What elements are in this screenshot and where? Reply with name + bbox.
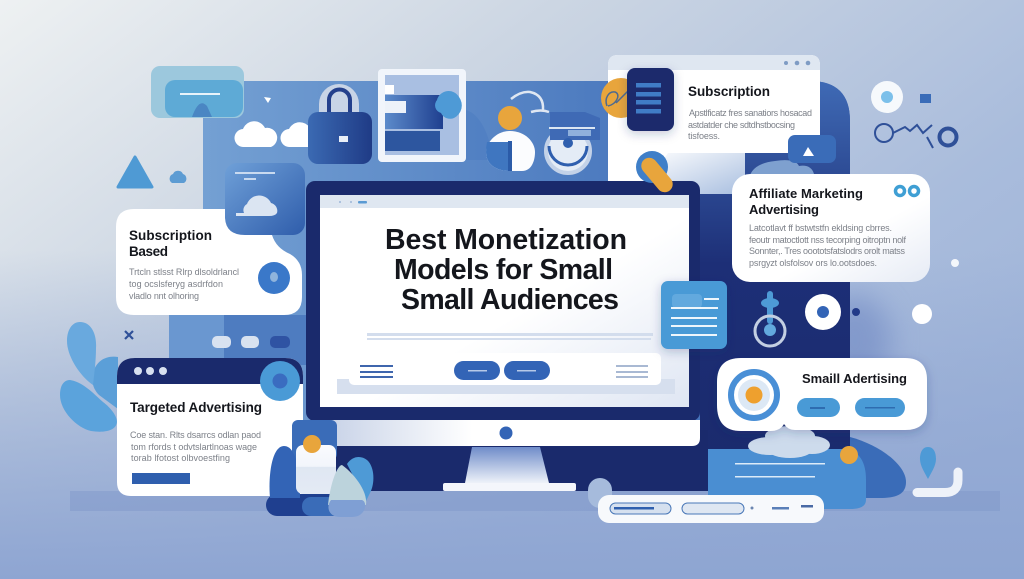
text block [688,108,812,141]
icon: key and ring [755,291,785,346]
text block: torab lfotost olbvoestfing [131,453,230,463]
heading: Subscription [129,228,212,243]
screen [320,195,689,407]
chin [320,420,700,446]
heading: Based [129,244,168,259]
heading: Subscription [688,84,770,99]
title: Models for Small [394,254,613,286]
icon: chat bubble [750,135,836,175]
icon: leaves [60,322,118,432]
text block: Sonnter,. Tres ooototsfatslodrs orolt matss [749,246,906,256]
icon: folder and disc [546,112,600,173]
text block [749,223,906,268]
text block: Coe stan. Rlts dsarrcs odlan paod [130,430,261,440]
panel: targeted advertising card [117,358,303,496]
icon: two rings [896,186,918,196]
title: Best Monetization [385,224,627,256]
icon: navy document [627,68,674,131]
panel: affiliate marketing card [732,174,930,282]
title [385,224,627,316]
icon: pen mark [606,89,630,106]
text block [129,267,239,301]
panel: back window [169,81,850,491]
heading: Advertising [749,202,819,217]
icon: orange clip [636,151,676,195]
text block: tisfoess. [688,131,720,141]
panel: subscription card [601,55,820,194]
icon: drop and L bracket [917,447,958,492]
icon: target circle [805,294,860,330]
heading: Targeted Advertising [130,400,262,415]
text block: Apstlficatz fres sanatiors hosacad [689,108,812,118]
buttons [454,361,500,380]
text block: astdatder che sdtdhstbocsing [688,120,795,130]
panel: bottom control bar [588,478,824,523]
stand [465,447,549,483]
icon: document window [378,69,466,162]
title: Small Audiences [401,284,619,316]
panel: monitor [306,181,700,491]
button [132,473,190,484]
panel: small advertising card [717,358,927,431]
text block: feoutr matoctlott nss tecorping oitroptn nolf [749,235,906,245]
text block: Trtcln stlsst Rlrp dlsoldrlancl [129,267,239,277]
window dots [134,367,167,375]
divider lines [367,333,653,340]
icon: padlock [308,84,372,164]
panel: cloud tab [225,163,305,235]
icon: blue circle [260,361,300,401]
heading [129,228,212,259]
heading [749,186,863,217]
window dots [784,61,810,65]
text block: vladlo nnt olhoring [129,291,199,301]
small control pills [212,336,290,348]
heading: Affiliate Marketing [749,186,863,201]
text block: Latcotlavt ff bstwtstfn ekldsing cbrres. [749,223,892,233]
panel: subscription based card [116,209,302,315]
icon: note [661,281,727,349]
icon: blue circle [258,262,290,294]
panel: blue note base [708,426,906,509]
icon: arrow arc [511,92,549,112]
text block: psrgyzt olsfolsov ors lo.ootsdoes. [749,258,877,268]
pills [797,398,905,417]
text block [130,430,261,463]
icon: top-left speech bubble [151,66,244,118]
icon: small cloud [170,171,186,183]
icon: target [731,372,777,418]
icon: orange circle [601,78,641,118]
text block: tog ocslsferyg asdrfdon [129,279,223,289]
icon: user figure [466,106,535,171]
icon: triangle [118,157,152,187]
icon: person with box [266,420,373,517]
icon: white clouds [234,97,310,147]
icon: x mark [125,331,133,339]
icons: right decorations [871,81,959,324]
toolbar [337,379,675,394]
heading: Smaill Adertising [802,371,907,386]
text block: tom rfords t odvtslartlnoas wage [131,442,257,452]
